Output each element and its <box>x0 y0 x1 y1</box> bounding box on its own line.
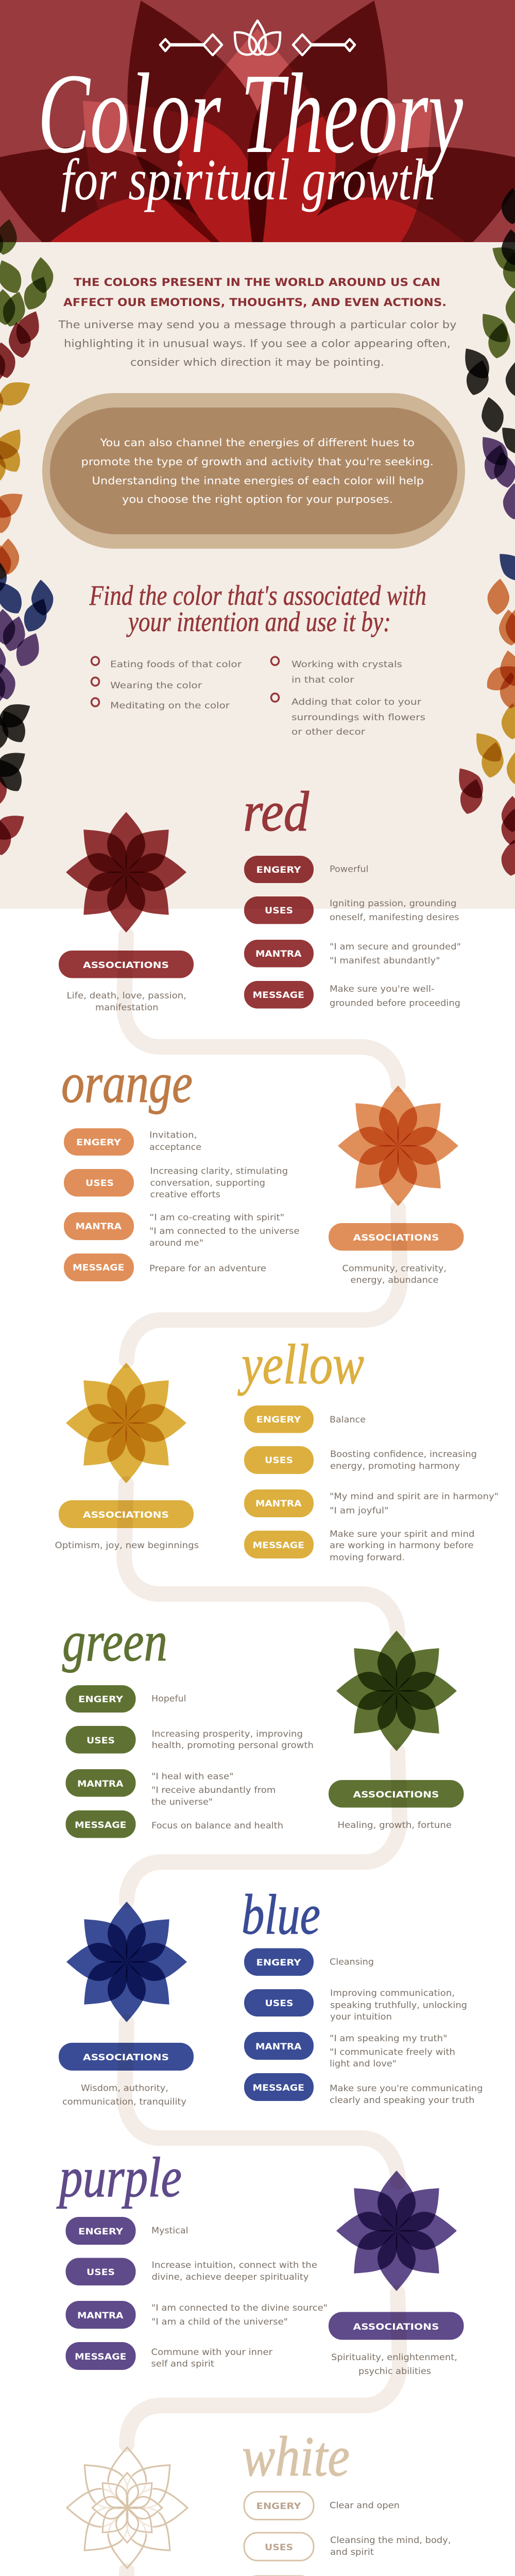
associations: manifestation <box>95 1003 159 1012</box>
uses row: USES <box>87 2267 115 2278</box>
uses row: creative efforts <box>150 1190 220 1199</box>
energy row <box>66 2217 188 2245</box>
message row: MESSAGE <box>252 990 304 1001</box>
uses row: conversation, supporting <box>150 1178 265 1188</box>
energy row: Balance <box>330 1415 366 1425</box>
intro text block: highlighting it in unusual ways. If you see a color appearing often, <box>64 337 451 349</box>
subtitle: for spiritual growth <box>61 147 435 212</box>
associations: ASSOCIATIONS <box>353 1790 439 1800</box>
energy row: ENGERY <box>78 2227 124 2237</box>
section: orange <box>61 1051 464 1285</box>
icon: yellow flower <box>66 1363 186 1483</box>
intro text block: The universe may send you a message through a particular color by <box>58 318 456 331</box>
message row: clearly and speaking your truth <box>330 2095 475 2105</box>
associations: ASSOCIATIONS <box>353 2322 439 2332</box>
heading: find the color: Find the color that's associated with <box>89 580 426 611</box>
message row: MESSAGE <box>75 1820 127 1831</box>
energy row <box>66 1685 186 1713</box>
energy row: ENGERY <box>256 1958 301 1968</box>
energy row: Cleansing <box>330 1957 374 1967</box>
associations <box>59 2043 194 2107</box>
icon: purple flower <box>336 2171 457 2291</box>
heading: find the color <box>89 580 426 637</box>
uses row: Increasing prosperity, improving <box>151 1729 303 1739</box>
heading: purple: purple <box>57 2145 182 2209</box>
mantra row: MANTRA <box>77 2311 124 2321</box>
message row: MESSAGE <box>252 2083 304 2093</box>
message row: grounded before proceeding <box>330 998 460 1008</box>
uses row: oneself, manifesting desires <box>330 912 459 922</box>
mantra row: "I am a child of the universe" <box>151 2317 288 2327</box>
section: yellow <box>55 1332 499 1562</box>
message row <box>66 1810 283 1838</box>
associations: Life, death, love, passion, <box>67 991 186 1001</box>
section: green <box>62 1609 464 1838</box>
mantra row <box>244 1489 499 1517</box>
associations: Spirituality, enlightenment, <box>331 2352 457 2362</box>
intro text block: THE COLORS PRESENT IN THE WORLD AROUND US CAN <box>74 276 440 289</box>
mantra row: around me" <box>149 1238 203 1248</box>
uses row: Increasing clarity, stimulating <box>150 1166 288 1176</box>
associations: ASSOCIATIONS <box>83 960 169 971</box>
message row <box>66 2342 272 2370</box>
uses row: and spirit <box>330 2547 374 2557</box>
mantra row: "I manifest abundantly" <box>330 956 440 965</box>
intro text block: AFFECT OUR EMOTIONS, THOUGHTS, AND EVEN ACTIONS. <box>63 296 447 309</box>
winding connector path <box>124 935 400 2576</box>
energy row <box>244 2492 400 2519</box>
bullet list: Adding that color to your <box>291 697 421 707</box>
uses row <box>64 1166 288 1199</box>
bullet list: Wearing the color <box>110 681 202 691</box>
section: red <box>59 779 461 1012</box>
icon: white outline flower <box>67 2447 187 2568</box>
mantra row: "I am secure and grounded" <box>330 942 461 952</box>
associations: Wisdom, authority, <box>81 2083 168 2093</box>
associations: Optimism, joy, new beginnings <box>55 1540 199 1550</box>
uses row <box>244 1446 477 1474</box>
uses row: USES <box>87 1736 115 1746</box>
mantra row: MANTRA <box>255 949 302 959</box>
message row: Make sure your spirit and mind <box>330 1529 475 1539</box>
heading: find the color: your intention and use it by: <box>126 606 391 637</box>
energy row <box>244 1405 366 1433</box>
callout: channel energies: You can also channel the energies of different hues to <box>99 436 415 449</box>
uses row <box>244 1988 467 2022</box>
mantra row <box>244 2032 455 2069</box>
message row: Commune with your inner <box>151 2347 272 2357</box>
associations <box>329 2312 464 2376</box>
energy row: Mystical <box>151 2226 188 2235</box>
associations <box>59 951 194 1012</box>
uses row: USES <box>85 1178 114 1189</box>
associations: Healing, growth, fortune <box>338 1820 452 1830</box>
energy row: ENGERY <box>78 1694 124 1705</box>
message row: Make sure you're well- <box>330 984 435 994</box>
energy row: ENGERY <box>256 865 301 875</box>
mantra row <box>64 1212 300 1248</box>
associations: communication, tranquility <box>62 2097 186 2107</box>
mantra row <box>66 1769 276 1807</box>
mantra row: MANTRA <box>255 1499 302 1509</box>
icon: blue flower <box>66 1902 187 2022</box>
callout: channel energies: Understanding the innate energies of each color will help <box>92 474 424 487</box>
energy row: ENGERY <box>76 1138 122 1148</box>
energy row: ENGERY <box>256 1415 301 1425</box>
decorative leaves: left edge upper <box>0 217 55 856</box>
message row: self and spirit <box>151 2359 215 2369</box>
uses row: USES <box>265 2543 293 2553</box>
heading: yellow: yellow <box>237 1332 364 1396</box>
mantra row: "My mind and spirit are in harmony" <box>330 1492 499 1501</box>
mantra row: "I am speaking my truth" <box>330 2033 447 2043</box>
mantra row: "I communicate freely with <box>330 2047 455 2057</box>
uses row: your intuition <box>330 2012 392 2022</box>
associations <box>55 1500 199 1550</box>
uses row: Igniting passion, grounding <box>330 899 456 908</box>
callout: channel energies: promote the type of growth and activity that you're seeking. <box>81 455 434 468</box>
associations: ASSOCIATIONS <box>353 1233 439 1243</box>
energy row: Powerful <box>330 865 369 874</box>
message row <box>244 981 460 1009</box>
icon: red flower <box>66 812 186 933</box>
section: blue <box>59 1883 483 2107</box>
message row <box>244 1529 475 1562</box>
associations <box>329 1780 464 1830</box>
uses row <box>244 896 459 924</box>
energy row: Clear and open <box>330 2501 400 2510</box>
uses row: Improving communication, <box>330 1988 455 1998</box>
section: purple <box>57 2145 464 2376</box>
uses row: USES <box>265 1998 294 2009</box>
bullet list: Meditating on the color <box>110 701 230 711</box>
energy row <box>244 856 369 883</box>
energy row: Hopeful <box>151 1694 186 1703</box>
uses row: divine, achieve deeper spirituality <box>151 2272 309 2282</box>
energy row: ENGERY <box>256 2501 301 2512</box>
energy row <box>64 1128 201 1156</box>
energy row: acceptance <box>149 1142 201 1152</box>
mantra row: "I receive abundantly from <box>151 1785 276 1795</box>
heading: green: green <box>62 1609 167 1673</box>
bullet list <box>92 657 425 737</box>
message row: MESSAGE <box>73 1263 125 1273</box>
uses row: speaking truthfully, unlocking <box>330 2000 467 2010</box>
icon: green flower <box>336 1631 457 1751</box>
uses row <box>244 2533 451 2561</box>
bullet list: Eating foods of that color <box>110 659 242 670</box>
header panel <box>0 0 515 242</box>
callout: channel energies: you choose the right option for your purposes. <box>122 493 393 505</box>
message row: MESSAGE <box>75 2352 127 2362</box>
mantra row: "I am connected to the divine source" <box>151 2303 328 2313</box>
decorative leaves: right edge upper <box>451 188 515 877</box>
callout: channel energies <box>42 393 465 549</box>
associations: ASSOCIATIONS <box>83 2053 169 2063</box>
message row: Make sure you're communicating <box>330 2083 483 2093</box>
uses row: Cleansing the mind, body, <box>330 2535 451 2545</box>
title: Color Theory <box>38 50 464 177</box>
message row: MESSAGE <box>252 1540 304 1551</box>
associations: psychic abilities <box>358 2366 431 2376</box>
heading: orange: orange <box>61 1051 193 1114</box>
uses row: Boosting confidence, increasing <box>330 1449 477 1459</box>
associations: ASSOCIATIONS <box>83 1510 169 1520</box>
mantra row: the universe" <box>151 1797 213 1807</box>
associations: energy, abundance <box>350 1275 439 1285</box>
uses row: USES <box>265 1455 293 1466</box>
bullet list: or other decor <box>291 727 365 737</box>
uses row <box>66 1726 314 1754</box>
heading: red: red <box>243 779 310 843</box>
mantra row <box>244 940 461 968</box>
mantra row: MANTRA <box>75 1222 122 1232</box>
bullet list: Working with crystals <box>291 659 402 670</box>
icon: lotus ornament <box>160 21 355 55</box>
associations <box>329 1223 464 1285</box>
mantra row: MANTRA <box>255 2042 302 2052</box>
energy row <box>244 1948 374 1976</box>
uses row: health, promoting personal growth <box>151 1740 314 1750</box>
intro text block <box>58 276 456 368</box>
energy row: Invitation, <box>149 1130 197 1140</box>
heading: blue: blue <box>242 1883 320 1946</box>
message row: are working in harmony before <box>330 1540 474 1550</box>
heading: white: white <box>242 2425 350 2488</box>
mantra row: "I heal with ease" <box>151 1771 234 1782</box>
mantra row: "I am joyful" <box>330 1505 388 1516</box>
bullet list: in that color <box>291 675 354 685</box>
mantra row: “I am co-creating with spirit" <box>149 1213 284 1222</box>
message row <box>64 1253 266 1281</box>
message row: Focus on balance and health <box>151 1821 283 1831</box>
message row: moving forward. <box>330 1553 405 1562</box>
uses row <box>66 2258 317 2285</box>
mantra row: MANTRA <box>77 1779 124 1789</box>
mantra row <box>66 2301 328 2329</box>
associations: Community, creativity, <box>342 1263 447 1274</box>
header lotus background <box>0 0 515 242</box>
icon: orange flower <box>338 1086 458 1206</box>
mantra row: "I am connected to the universe <box>149 1226 300 1236</box>
uses row: Increase intuition, connect with the <box>151 2260 317 2270</box>
intro text block: consider which direction it may be pointing. <box>130 356 384 368</box>
message row: Prepare for an adventure <box>149 1263 266 1274</box>
mantra row: light and love" <box>330 2059 397 2069</box>
uses row: energy, promoting harmony <box>330 1461 460 1471</box>
message row <box>244 2073 483 2105</box>
section: white <box>57 2425 471 2576</box>
bullet list: surroundings with flowers <box>291 713 425 723</box>
uses row: USES <box>265 906 293 916</box>
